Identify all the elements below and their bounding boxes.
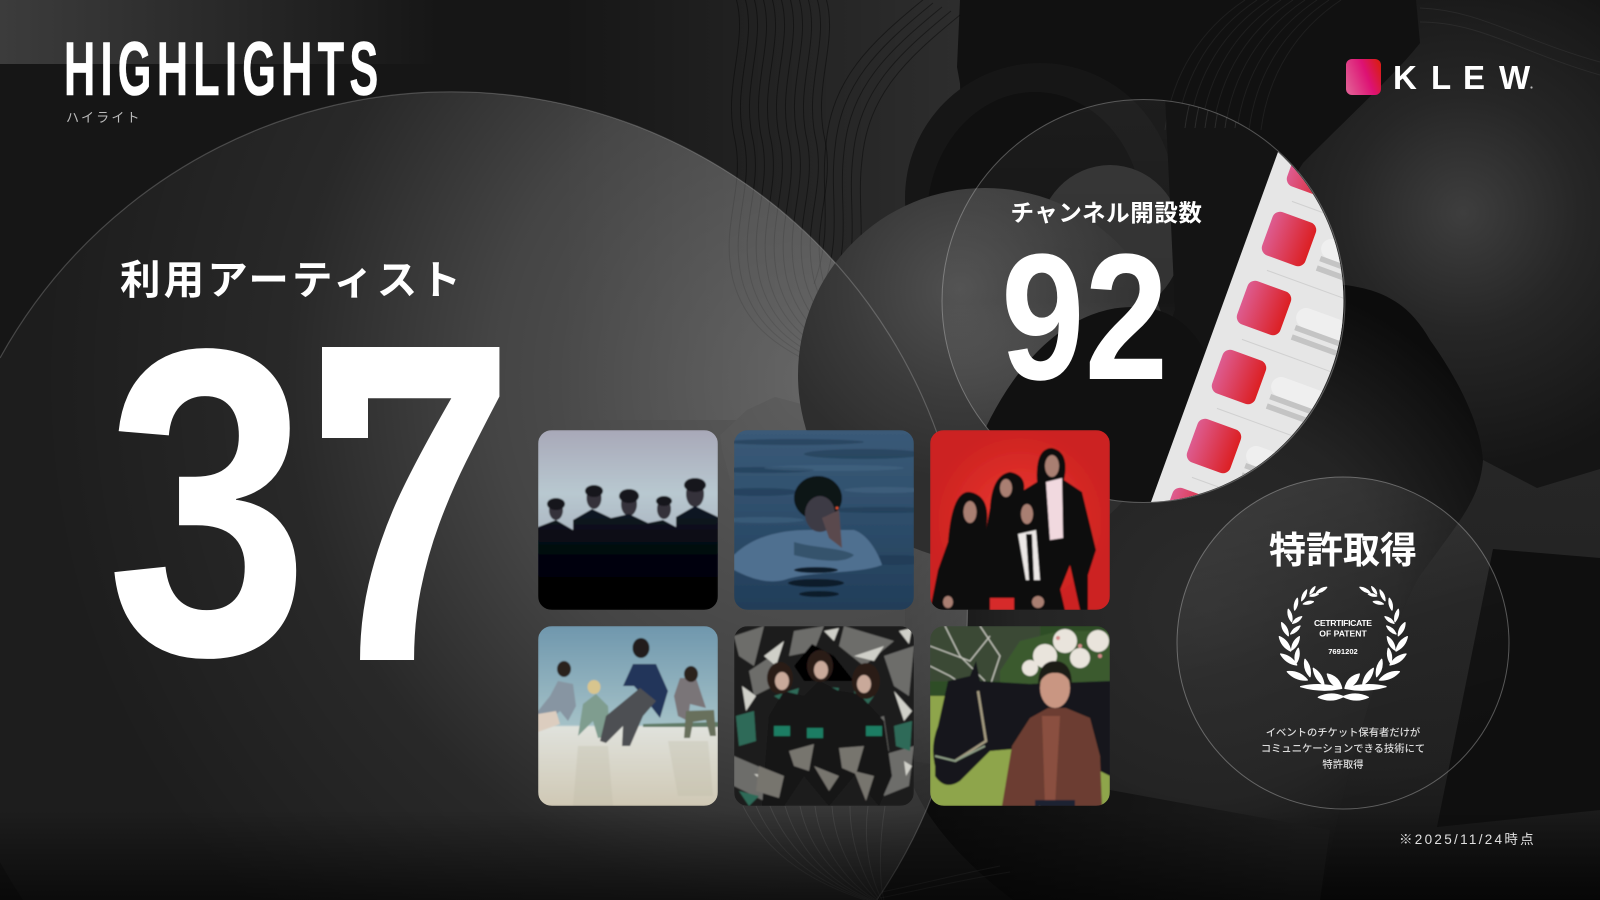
artists number [106,248,516,757]
certificate text: 7691202 [1328,647,1358,656]
certificate text [1314,618,1372,656]
patent description: 特許取得 [1322,758,1364,771]
channel circle dark interior [986,102,1250,502]
patent description: イベントのチケット保有者だけが [1266,726,1421,739]
panel: channels circle [942,99,1346,503]
photo: person in water [734,430,914,610]
channels label: チャンネル開設数 [1010,200,1203,226]
channel list strip [1151,152,1344,502]
photo: man with horse [930,626,1110,806]
artists label: 利用アーティスト [120,257,464,303]
photo: band silhouette on grey sky [538,430,718,610]
artists number: 3 [106,258,309,747]
contour lines [729,0,960,365]
certificate text: OF PATENT [1319,628,1367,638]
certificate text: CETRTIFICATE [1314,618,1372,628]
fan lines [743,806,1010,900]
subtitle: ハイライト [66,110,142,125]
title: HIGHLIGHTS [64,27,384,112]
footnote: ※2025/11/24時点 [1399,832,1536,847]
logo: KLEW [1393,59,1531,96]
list rows [1286,165,1324,214]
patent description [1261,726,1425,771]
bottom fade [0,810,1600,900]
panel: artists big circle [0,92,1172,900]
icon: laurel wreath [1279,587,1407,700]
channels number: 92 [1001,217,1168,418]
panel: patent circle [1177,477,1509,809]
photo: four people on reflective beach [538,626,718,806]
artists number: 7 [306,248,516,757]
photo: trio in shattered glass collage [734,626,914,806]
photo: band on red background [930,430,1110,610]
patent heading: 特許取得 [1269,530,1417,571]
middle sphere [798,188,1172,562]
patent description: コミュニケーションできる技術にて [1261,742,1425,755]
